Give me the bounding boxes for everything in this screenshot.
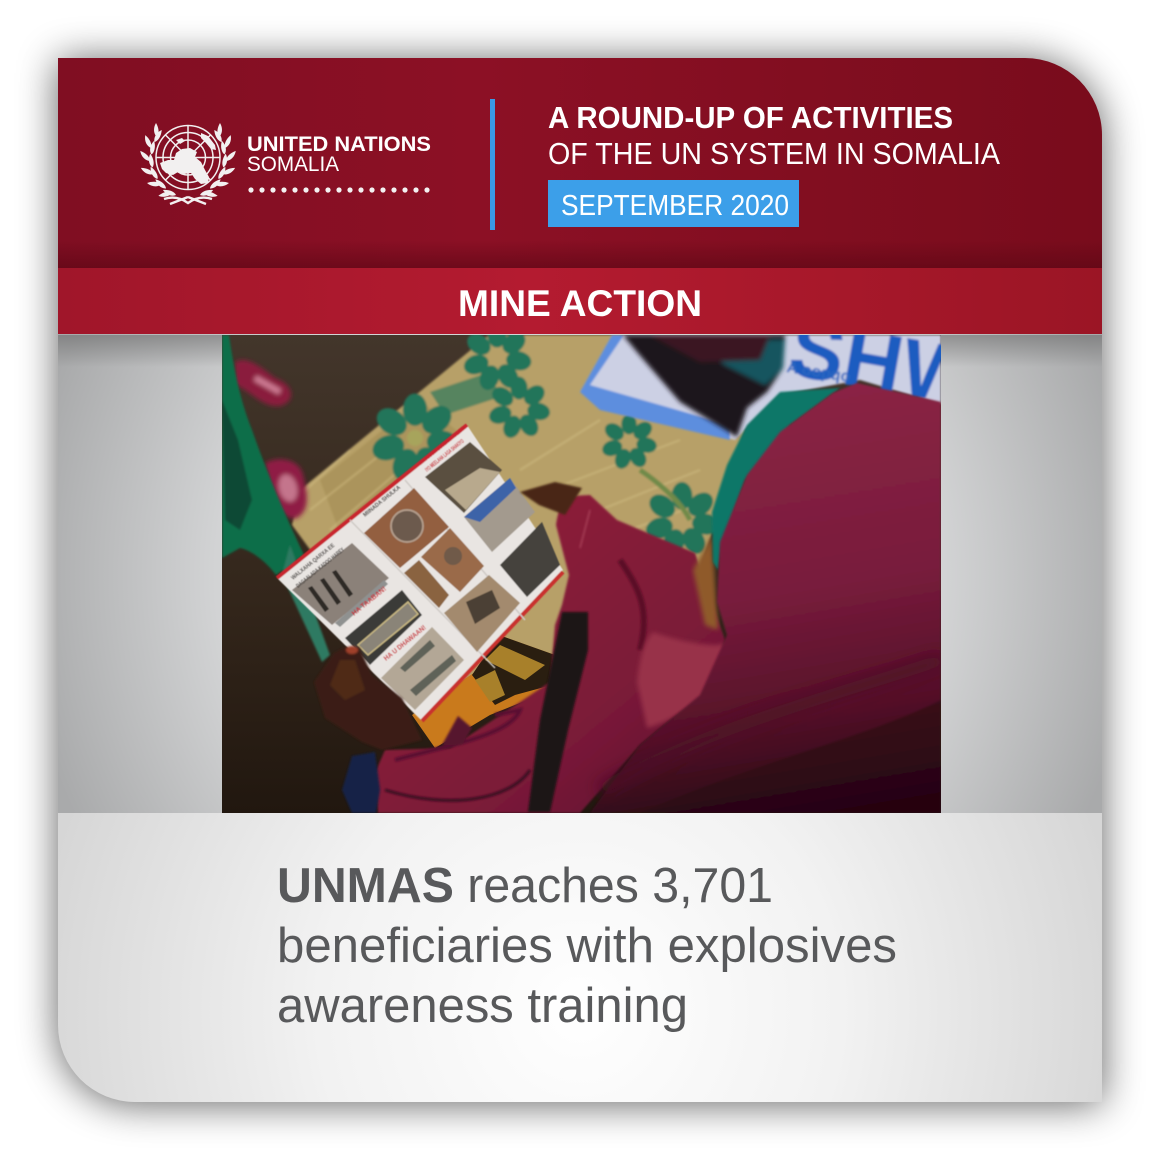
lit sleeve fold: [637, 632, 733, 728]
dotted rule: [248, 187, 430, 193]
lower text panel background: [58, 813, 1102, 1102]
headline: beneficiaries with explosives: [277, 919, 897, 973]
green plastic chair: [222, 335, 330, 662]
white and blue cloth with lettering: SHW: [783, 302, 986, 425]
leaflet captions: HA TAABAN!: [351, 586, 388, 618]
header title: A ROUND-UP OF ACTIVITIES: [548, 100, 953, 135]
wreath left: [139, 123, 177, 198]
UN emblem logo: [139, 123, 237, 204]
organisation name: UNITED NATIONS: [247, 133, 431, 156]
white and blue cloth with lettering: [579, 335, 941, 441]
headline: awareness training: [277, 979, 688, 1033]
section heading: mine action: MINE ACTION: [458, 283, 702, 324]
blue shoe: [342, 752, 380, 813]
header title: [548, 106, 1000, 164]
woman's hand holding top of leaflet: [520, 482, 582, 515]
header panel: [58, 58, 1102, 268]
dark camera strap: [528, 612, 588, 812]
section band: [58, 268, 1102, 334]
pink sandals: [235, 360, 307, 518]
main figure clothing: [374, 495, 725, 813]
photo: woman reading a mine awareness leaflet: [222, 335, 941, 813]
leaflet captions: K'A FOGGIN GOOBAHA HALISTA: [418, 425, 468, 467]
organisation name: SOMALIA: [247, 152, 340, 176]
grey photo backdrop: [58, 334, 1102, 814]
leaflet captions: IYO MEELAHA LAGA SHAKIYO: [424, 439, 466, 474]
date badge: SEPTEMBER 2020: [561, 190, 789, 222]
clothing folds: [385, 510, 644, 800]
leaflet: WALXAHA QARXA EE: [290, 543, 336, 582]
leaflet: MIINADA SHULKA: [362, 485, 402, 519]
header title: OF THE UN SYSTEM IN SOMALIA: [548, 136, 1000, 171]
leaflet pictures: [292, 442, 560, 710]
neck skin: [693, 535, 718, 630]
wreath right: [199, 123, 237, 198]
leaflet captions: HA U DHAWAAN!: [383, 624, 428, 663]
woven mat: [292, 322, 745, 725]
mat flower motifs: [369, 322, 721, 559]
leaflet: [277, 425, 563, 721]
orange patterned skirt: [412, 635, 555, 748]
dark seated figure: [623, 335, 785, 437]
blue divider: [490, 99, 495, 230]
date badge: [548, 180, 799, 227]
headline: UNMAS reaches 3,701: [277, 859, 773, 913]
teal underscarf: [712, 388, 840, 570]
headline: [277, 859, 897, 1033]
white and blue cloth with lettering: A oopqo: [785, 359, 852, 386]
organisation name: [248, 136, 430, 171]
leaflet captions: [351, 425, 468, 663]
woman's hand holding bottom of leaflet: [314, 646, 422, 750]
leaflet: DAGAALADA KADOO HAREY: [295, 547, 346, 590]
floor: [222, 335, 941, 813]
maroon headscarf: [590, 383, 941, 813]
